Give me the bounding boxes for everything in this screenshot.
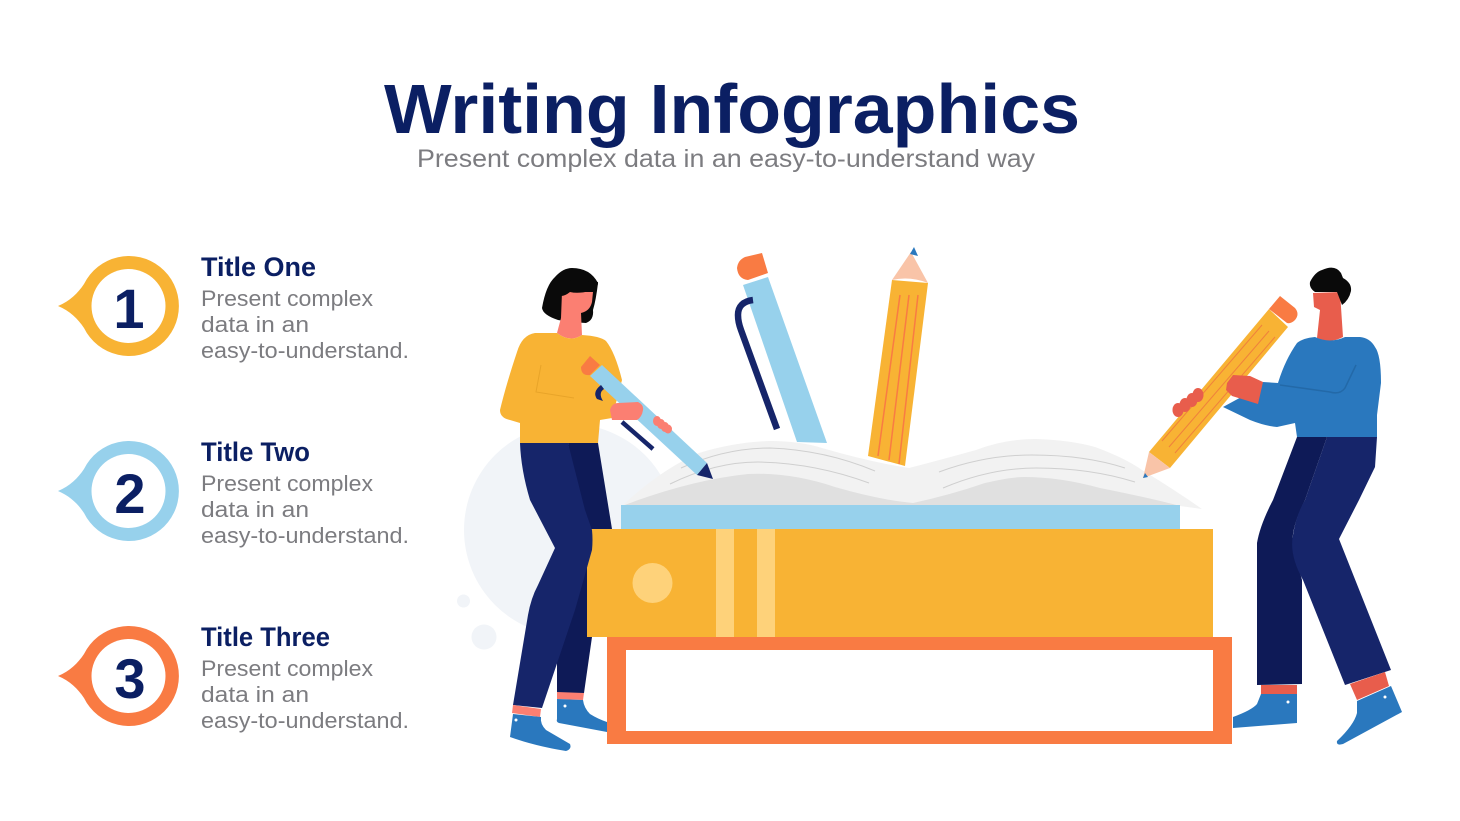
item text 2: data in an (201, 497, 309, 522)
front shoe (1337, 686, 1402, 745)
item text 2: easy-to-understand. (201, 523, 409, 548)
title: Writing Infographics (384, 70, 1080, 148)
book: blue block (621, 505, 1180, 529)
figure: woman (500, 268, 713, 751)
icon: large pen (737, 253, 827, 443)
front sock (1350, 672, 1389, 700)
item 2 (58, 437, 409, 548)
book: orange volume (607, 637, 1232, 744)
sweater (1223, 337, 1381, 437)
hair fringe (561, 280, 598, 296)
sweater fold (536, 365, 574, 398)
item text 3 (201, 656, 409, 733)
number 2: 2 (114, 462, 146, 525)
item text 1 (201, 286, 409, 363)
book: yellow volume (587, 529, 1213, 637)
front leg (1292, 437, 1391, 685)
face and neck (557, 292, 593, 339)
item text 1: data in an (201, 312, 309, 337)
open book pages (622, 439, 1202, 509)
subtitle: Present complex data in an easy-to-understand way (417, 145, 1036, 173)
item heading 2: Title Two (201, 437, 310, 467)
sweater (500, 333, 622, 443)
item text 1: Present complex (201, 286, 374, 311)
man: back leg (1233, 437, 1327, 728)
hand (1226, 375, 1263, 404)
item 3 (58, 622, 409, 733)
item text 3: Present complex (201, 656, 374, 681)
marker badge 1 (58, 256, 179, 356)
held pen (581, 356, 713, 479)
badge centre 2 (92, 454, 166, 528)
badge centre 3 (92, 639, 166, 713)
item text 2: Present complex (201, 471, 374, 496)
item text 2 (201, 471, 409, 548)
fingers (1172, 388, 1204, 417)
item heading 3: Title Three (201, 622, 330, 652)
marker badge 2 (58, 441, 179, 541)
face and neck (1313, 292, 1343, 341)
badge centre 1 (92, 269, 166, 343)
woman: back leg (557, 443, 612, 732)
front sock and shoe (512, 705, 541, 717)
front leg (513, 443, 592, 708)
marker badge 3 (58, 626, 179, 726)
background circles (457, 424, 676, 650)
item text 3: easy-to-understand. (201, 708, 409, 733)
figure: man (1143, 268, 1402, 745)
item 1 (58, 252, 409, 363)
sweater fold (1280, 365, 1356, 393)
icon: large pencil (868, 247, 928, 466)
number 1: 1 (113, 277, 145, 340)
hand (610, 402, 643, 420)
big pencil (1143, 296, 1298, 478)
item text 1: easy-to-understand. (201, 338, 409, 363)
hair (1310, 268, 1351, 305)
item text 3: data in an (201, 682, 309, 707)
back hair (542, 268, 598, 323)
item heading 1: Title One (201, 252, 316, 282)
fingers (653, 416, 672, 434)
number 3: 3 (114, 647, 146, 710)
